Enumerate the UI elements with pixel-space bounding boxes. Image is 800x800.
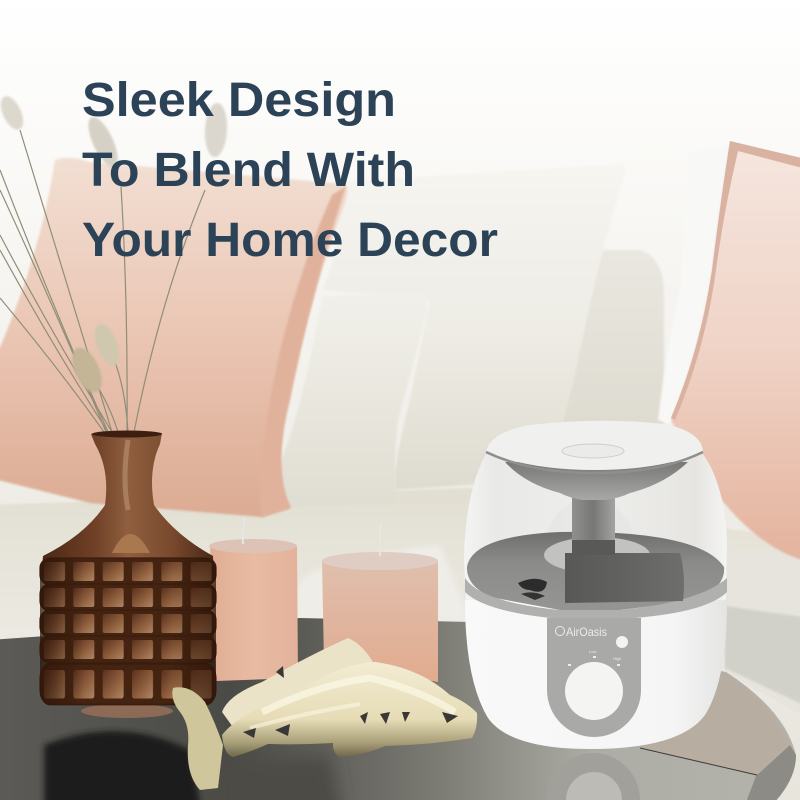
sofa and cushions	[0, 141, 800, 720]
gold fish figurine	[172, 638, 477, 790]
candle left	[209, 518, 298, 681]
right white cushion	[658, 145, 735, 425]
title: Your Home Decor	[82, 214, 498, 267]
right pink cushion	[671, 142, 800, 562]
dial knob	[565, 662, 623, 720]
sofa seat	[0, 488, 800, 640]
candle right	[322, 524, 438, 682]
dial labels	[568, 649, 621, 666]
title: To Blend With	[82, 144, 415, 197]
sofa back	[560, 250, 664, 430]
pampas tufts	[0, 93, 228, 397]
water tray	[467, 532, 724, 610]
table rim	[745, 745, 796, 800]
base body	[465, 600, 727, 749]
dark flecks	[243, 666, 458, 738]
pink cushion piping	[260, 186, 346, 517]
seat front light strip	[297, 545, 470, 622]
tail	[172, 687, 223, 790]
lid	[486, 421, 703, 470]
dorsal fin	[222, 638, 373, 730]
vase neck and shoulder	[41, 431, 214, 580]
mist funnel	[505, 462, 688, 500]
dome	[464, 450, 727, 600]
dial labels: High	[613, 656, 621, 661]
dark reflection left	[44, 731, 205, 800]
reflection of humidifier	[546, 753, 640, 800]
inner dome shading	[540, 498, 640, 570]
table top beige right area	[640, 674, 790, 776]
title	[82, 74, 498, 267]
reflections centre	[215, 755, 345, 800]
black debris seen through dome	[518, 579, 547, 592]
logo: AirOasis	[566, 625, 607, 639]
vase mouth	[92, 430, 162, 438]
title: Sleek Design	[82, 74, 396, 127]
power button	[616, 636, 628, 648]
left pink cushion	[0, 158, 347, 517]
vase foot	[81, 704, 173, 718]
vase	[40, 430, 216, 718]
gloss highlights	[125, 440, 128, 510]
humidifier	[464, 421, 727, 749]
highlights	[262, 678, 455, 712]
textured cushion at right	[720, 548, 800, 720]
ultrasonic disc	[544, 537, 650, 573]
white rear cushion	[322, 164, 626, 490]
body edge shading	[40, 558, 216, 705]
logo icon	[556, 626, 564, 636]
small cream cushion	[278, 293, 427, 507]
table top	[0, 618, 796, 800]
control panel	[547, 618, 641, 737]
dried pampas stems	[0, 93, 228, 432]
tray rim band	[465, 578, 727, 619]
tube	[572, 497, 615, 555]
vase rows	[40, 558, 216, 704]
body	[222, 662, 477, 757]
table	[0, 618, 796, 800]
dial labels: Low	[589, 649, 596, 654]
pump box	[565, 553, 684, 603]
